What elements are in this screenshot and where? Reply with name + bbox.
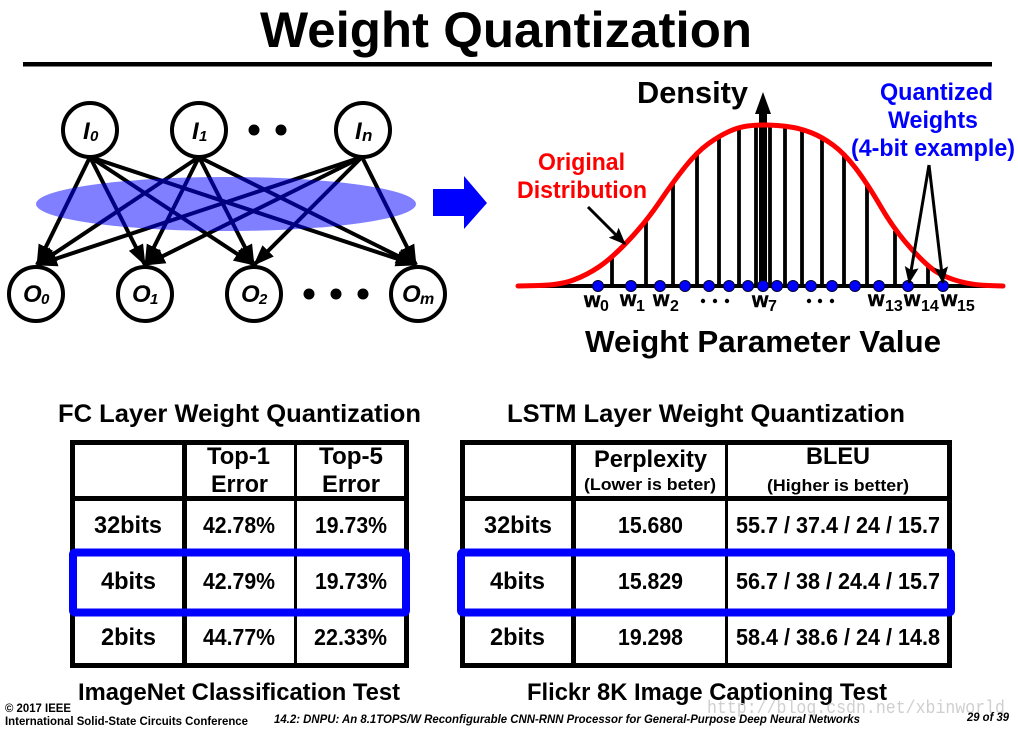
footer: paper title: 14.2: DNPU: An 8.1TOPS/W Reconfigurable CNN-RNN Processor for General-Purpose Deep Neural Networks [274,714,860,726]
weight labels: 15 [957,298,975,315]
output node O0: 0 [41,291,50,308]
weight labels: w [940,288,958,311]
input node I1 [172,103,226,157]
header cells: Perplexity [594,446,708,473]
header cells: Error [211,471,268,498]
weight labels: w [903,288,921,311]
panel: LSTM layer table [461,400,951,706]
footer: copyright: © 2017 IEEE [5,703,71,715]
quantized weight dots [592,280,948,292]
row: 32bits: 32bits [484,512,552,539]
footer: copyright: International Solid-State Circuits Conference [5,716,248,728]
caption: ImageNet: ImageNet Classification Test [78,679,400,706]
input node I1: I [192,118,200,145]
row: 32bits [484,512,940,539]
panel: FC layer table [58,400,421,706]
weight labels: 7 [768,298,777,315]
weight labels: w [619,288,637,311]
table grid [72,442,406,666]
row: 32bits [94,512,387,539]
input node I0 [63,103,117,157]
quantized weights label: Weights [888,107,978,134]
weight labels: 1 [636,298,645,315]
input node I1: 1 [199,128,207,145]
row: 4bits: 19.73% [315,568,387,594]
input node I0: 0 [90,128,99,145]
row: 32bits: 55.7 / 37.4 / 24 / 15.7 [736,512,940,538]
footer: page number: 29 of 39 [966,712,1010,724]
network connections [37,157,416,265]
density chart [517,75,1015,359]
output node O1 [118,267,172,321]
input node In: n [362,126,372,145]
row: 32bits: 42.78% [203,512,275,538]
output node O0: O [23,281,42,308]
row: 2bits [101,624,387,651]
output node O0 [9,267,63,321]
weight labels: w [867,288,885,311]
original distribution label: Distribution [517,177,647,204]
arrow: network to distribution [433,176,487,229]
header cells: (Higher is better) [767,476,909,495]
original distribution curve [518,125,1003,286]
quantized weights label: Quantized [880,79,993,106]
row: 32bits: 32bits [94,512,162,539]
weight labels: w [652,288,670,311]
weight labels [583,288,975,315]
row: 2bits: 2bits [490,624,545,651]
density axis arrow [755,92,771,286]
input node In [336,103,390,157]
original distribution label [517,149,647,204]
row: 2bits: 58.4 / 38.6 / 24 / 14.8 [736,624,940,650]
row: 32bits: 19.73% [315,512,387,538]
input node I0: I [83,118,91,145]
quantized weights label [851,79,1015,162]
heading: LSTM layer: LSTM Layer Weight Quantization [507,400,905,428]
original distribution label: Original [538,149,625,176]
row: 2bits: 2bits [101,624,156,651]
weight labels: 2 [670,298,679,315]
density label: Density [637,75,749,110]
blue highlight box [73,552,406,612]
output node O2: 2 [258,291,268,308]
quantized weight stems [612,125,928,286]
caption: Flickr: Flickr 8K Image Captioning Test [527,679,887,706]
header cells [584,443,909,495]
output node O1: O [132,281,151,308]
table grid [462,442,950,666]
header cells: Error [322,471,380,498]
weight labels: 14 [921,298,939,315]
row: 4bits: 42.79% [203,568,275,594]
output node Om [391,267,445,321]
row: 2bits: 22.33% [314,624,387,650]
weight labels: w [583,289,601,312]
weight labels: 0 [600,298,609,315]
output node Om: m [420,291,434,308]
row: 4bits [490,568,940,595]
weights ellipse highlight [36,177,416,231]
output node O1: 1 [150,291,158,308]
output node Om: O [402,281,421,308]
row: 4bits: 56.7 / 38 / 24.4 / 15.7 [736,568,940,594]
row: 4bits: 15.829 [618,568,683,594]
output node O2 [227,267,281,321]
x axis title: Weight Parameter Value [585,324,941,359]
input ellipsis dots [248,124,286,136]
output ellipsis dots [304,288,368,300]
row: 2bits: 19.298 [618,624,683,650]
input node In: I [355,118,363,145]
arrows: quantized weights pointers [909,165,943,283]
arrow: original distribution pointer [588,207,625,244]
axis ellipsis dots [701,299,834,303]
title underline [23,62,992,66]
weight labels: w [751,289,769,312]
row: 4bits: 4bits [490,568,545,595]
horizontal axis [517,284,1004,288]
row: 2bits: 44.77% [203,624,275,650]
footer: copyright [5,703,248,728]
header cells [207,443,383,498]
title: Weight Quantization [260,2,752,58]
quantized weights label: (4-bit example) [851,135,1015,162]
blue highlight box [461,552,951,612]
row: 2bits [490,624,940,651]
header cells: Top-5 [319,443,383,470]
neural network diagram [9,103,445,321]
header cells: Top-1 [207,443,270,470]
row: 32bits: 15.680 [618,512,683,538]
row: 4bits [101,568,387,595]
row: 4bits: 4bits [101,568,156,595]
header cells: BLEU [806,443,870,470]
weight labels: 13 [885,298,903,315]
output node O2: O [241,281,260,308]
header cells: (Lower is beter) [584,475,716,494]
heading: FC layer: FC Layer Weight Quantization [58,400,421,428]
